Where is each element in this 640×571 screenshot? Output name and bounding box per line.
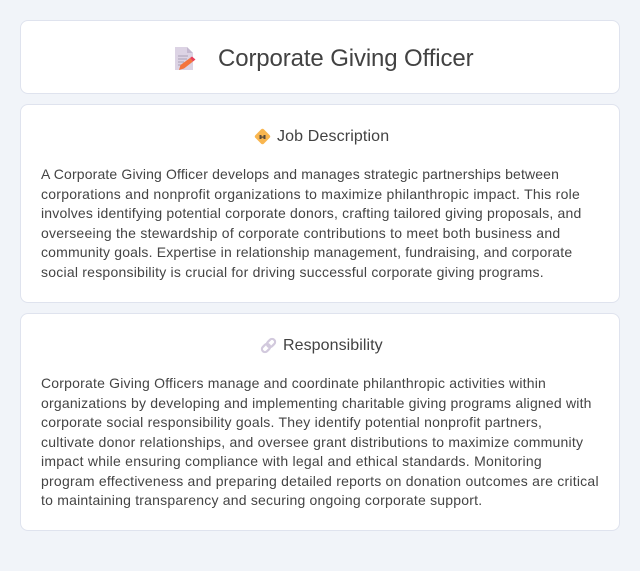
text: job description body <box>41 166 581 280</box>
heading: Corporate Giving Officer: Corporate Giving Officer <box>218 45 473 72</box>
panel: responsibility <box>20 313 620 531</box>
text: responsibility body: to maintaining transparency and securing ongoing corporate support. <box>41 492 482 508</box>
text: responsibility body: cultivate donor relationships, and oversee grant distributions to maximize community <box>41 434 583 450</box>
text: responsibility body: organizations by developing and implementing charitable giving programs aligned with <box>41 394 592 410</box>
text: responsibility body: impact while ensuring compliance with legal and ethical standards. Monitoring <box>41 453 542 469</box>
text: responsibility body: Corporate Giving Officers manage and coordinate philanthropic activities within <box>41 375 546 391</box>
text: job description body: involves identifying potential corporate donors, crafting tailored giving proposals, and <box>41 205 581 221</box>
text: responsibility body: program effectiveness and preparing detailed reports on donation outcomes are critical <box>41 472 599 488</box>
icon: chain link <box>260 338 276 354</box>
panel: title <box>20 20 620 94</box>
heading: Job Description: Job Description <box>277 128 389 145</box>
text: job description body: community goals. Expertise in relationship management, fundraising, and corporate <box>41 244 572 260</box>
text: responsibility body: corporate social responsibility goals. They identify potential nonprofit partners, <box>41 414 542 430</box>
text: job description body: A Corporate Giving Officer develops and manages strategic partnerships between <box>41 166 559 182</box>
text: job description body: social responsibility is crucial for driving successful corporate giving programs. <box>41 264 544 280</box>
text: job description body: corporations and nonprofit organizations to maximize philanthropic impact. This role <box>41 186 580 202</box>
icon: diamond sign <box>254 128 270 144</box>
text: responsibility body <box>41 375 599 508</box>
heading: Responsibility: Responsibility <box>283 337 383 354</box>
text: job description body: overseeing the stewardship of corporate contributions to meet both business and <box>41 224 560 240</box>
icon: document with pencil <box>175 47 196 70</box>
panel: job description <box>20 104 620 303</box>
